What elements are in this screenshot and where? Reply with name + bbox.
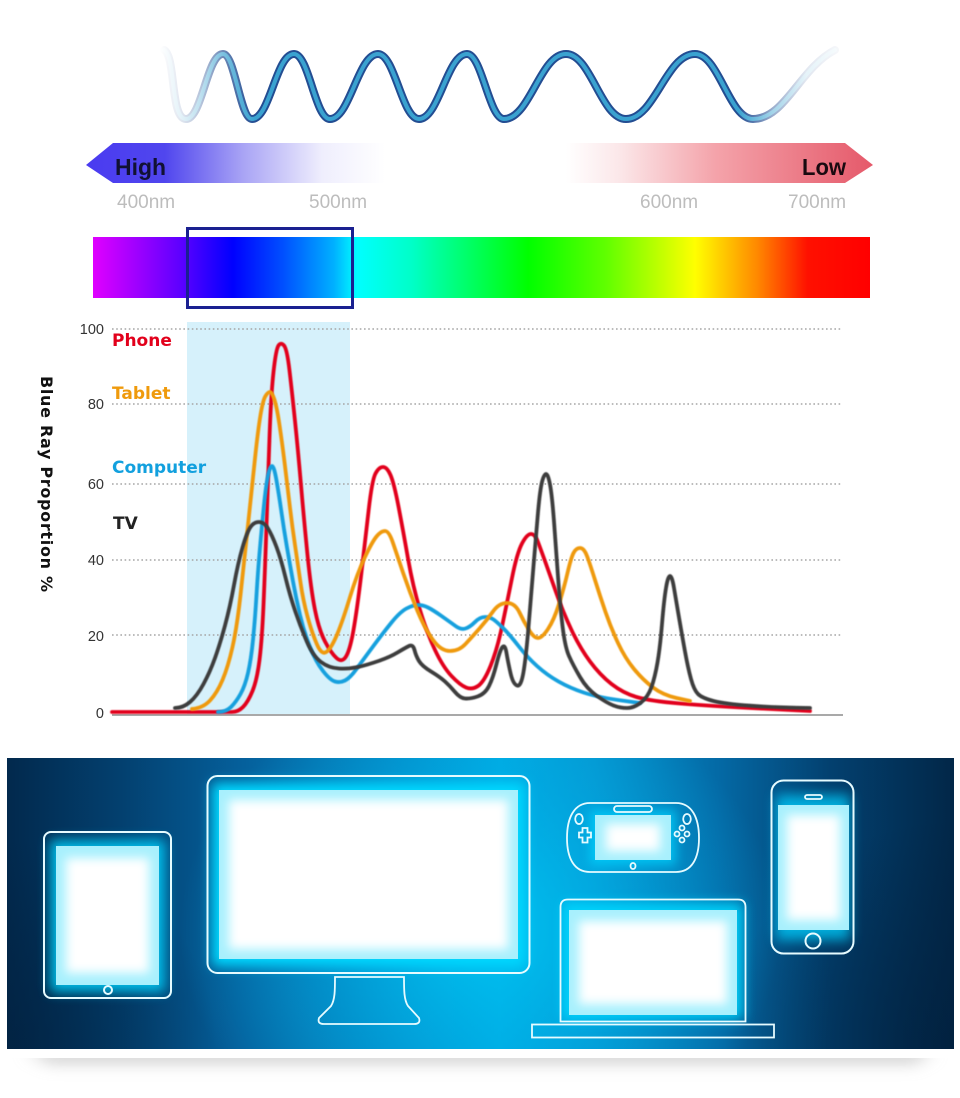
curve: phone bbox=[112, 344, 810, 712]
intensity arrow: high to low bbox=[86, 143, 873, 183]
y axis title: Blue Ray Proportion % bbox=[37, 376, 56, 592]
blue light highlight box bbox=[188, 228, 352, 308]
wave illustration bbox=[164, 50, 835, 119]
legend: computer: Computer bbox=[112, 458, 207, 478]
x axis bbox=[112, 714, 843, 716]
device: tablet bbox=[44, 832, 171, 998]
y axis labels: 80 bbox=[88, 397, 104, 413]
y axis labels: 0 bbox=[96, 706, 104, 722]
wavelength labels bbox=[117, 192, 846, 213]
legend: phone: Phone bbox=[112, 331, 172, 351]
device: monitor bbox=[208, 776, 530, 1024]
devices panel bbox=[7, 758, 954, 1049]
wavelength labels: 400nm bbox=[117, 192, 175, 213]
curve: tablet bbox=[192, 392, 690, 709]
legend: tablet: Tablet bbox=[112, 384, 171, 404]
wavelength labels: 600nm bbox=[640, 192, 698, 213]
spectrum bar bbox=[93, 237, 870, 298]
legend: tv: TV bbox=[113, 514, 139, 534]
wavelength labels: 700nm bbox=[788, 192, 846, 213]
curve: tv bbox=[175, 474, 810, 708]
label: High: High bbox=[115, 154, 166, 180]
highlighted blue band bbox=[187, 322, 350, 714]
y axis labels: 20 bbox=[88, 629, 104, 645]
y axis labels bbox=[80, 322, 104, 722]
label: Low: Low bbox=[802, 154, 846, 180]
curve: computer bbox=[218, 466, 640, 712]
device: phone bbox=[772, 780, 854, 954]
y axis labels: 40 bbox=[88, 553, 104, 569]
device: game controller bbox=[567, 803, 699, 872]
y axis labels: 60 bbox=[88, 477, 104, 493]
y axis labels: 100 bbox=[80, 322, 104, 338]
panel shadow bbox=[25, 1050, 935, 1062]
device: laptop bbox=[532, 900, 774, 1038]
chart bbox=[37, 322, 843, 722]
wavelength labels: 500nm bbox=[309, 192, 367, 213]
